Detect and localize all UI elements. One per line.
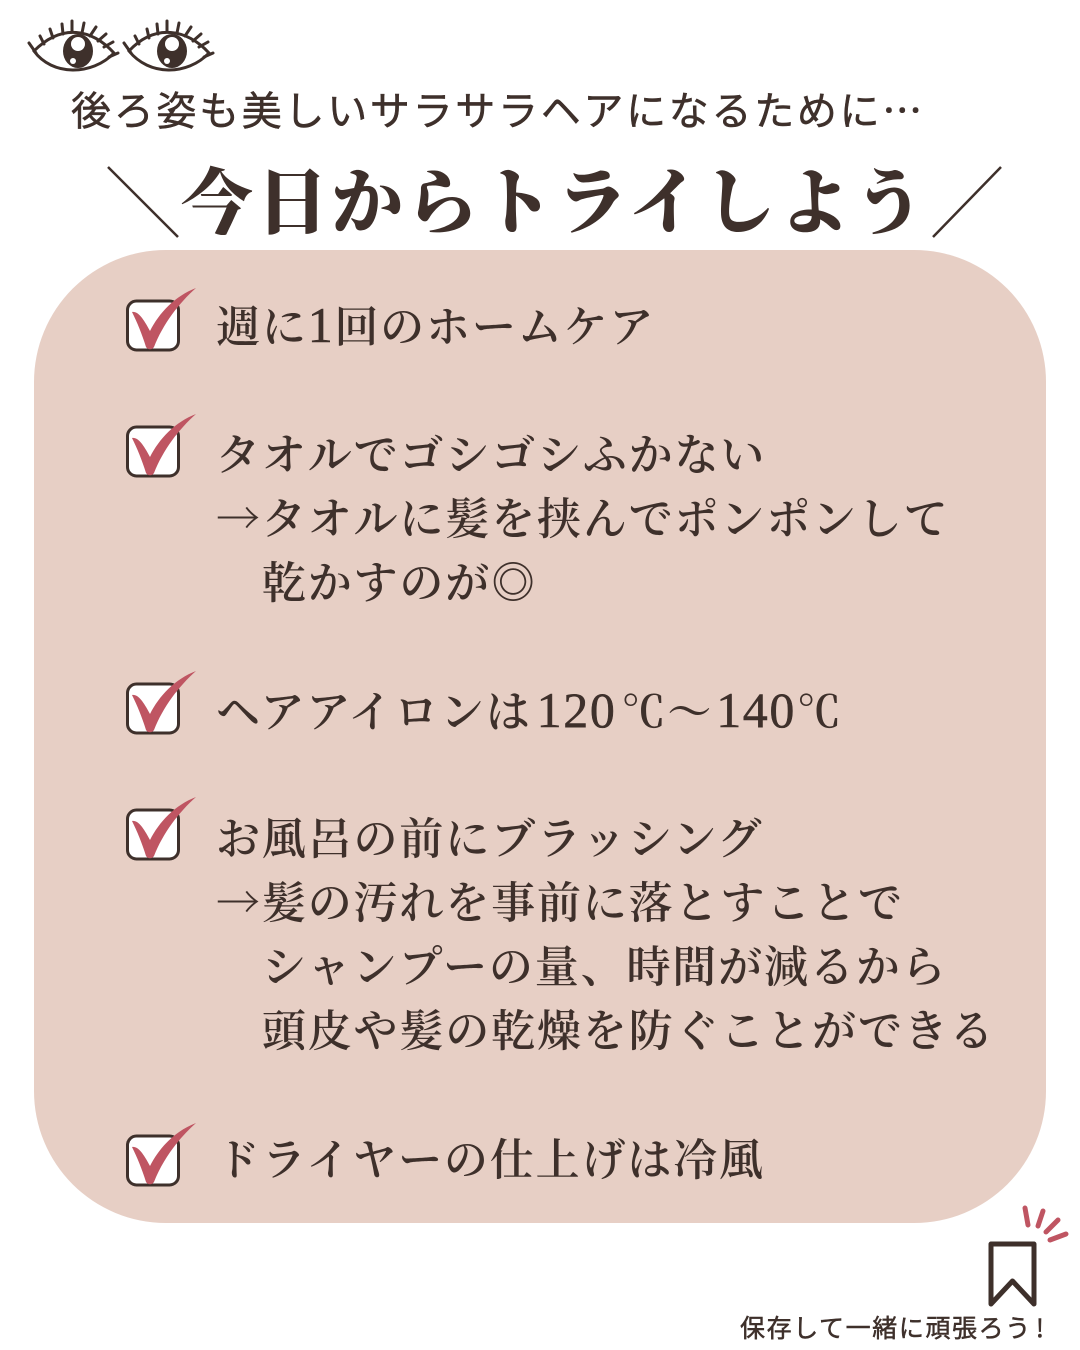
text: item 5: ドライヤーの仕上げは冷風 [216,1136,765,1185]
text: item 1: 週に1回のホームケア [216,297,655,353]
text: item 4: シャンプーの量、時間が減るから [262,943,947,992]
text: item 3: ヘアアイロンは120℃～140℃ [216,676,843,740]
text: item 2: 乾かすのが◎ [262,547,537,611]
icon: checkbox 3 [126,671,196,734]
footer note: 保存して一緒に頑張ろう! [740,1309,1046,1345]
text: item 2 [216,431,950,611]
subtitle: 後ろ姿も美しいサラサラヘアになるために… [71,79,925,137]
text: item 4: →髪の汚れを事前に落とすことで [216,867,904,931]
heading with slashes: 今日からトライしよう [181,164,929,244]
text: item 2: タオルでゴシゴシふかない [216,431,766,480]
icon: checkbox 5 [126,1123,196,1186]
text: item 4 [216,815,995,1056]
icon: pair of eyes [27,20,215,72]
icon: bookmark [988,1206,1068,1306]
text: item 2: →タオルに髪を挟んでポンポンして [216,483,950,547]
panel: checklist [34,250,1046,1223]
icon: checkbox 1 [126,288,196,352]
text: item 4: 頭皮や髪の乾燥を防ぐことができる [262,1007,995,1056]
text: item 4: お風呂の前にブラッシング [216,815,763,864]
icon: checkbox 2 [126,414,196,478]
icon: checkbox 4 [126,797,196,860]
